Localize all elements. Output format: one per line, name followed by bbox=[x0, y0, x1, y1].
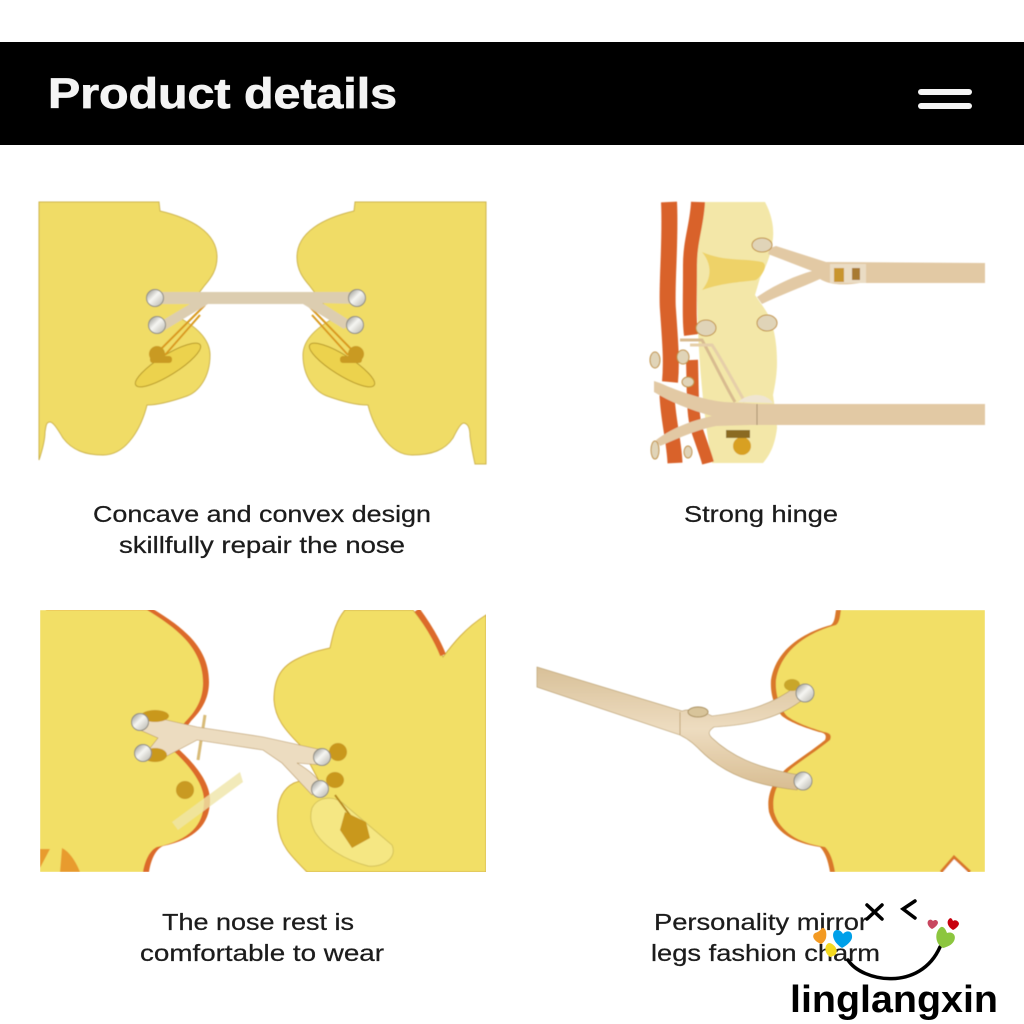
rivet back bbox=[784, 679, 800, 691]
panel: temple arm view bbox=[537, 610, 985, 872]
back nose pad bbox=[172, 715, 243, 830]
title: Product details bbox=[48, 70, 397, 118]
bridge bbox=[156, 292, 358, 330]
lens bbox=[773, 610, 985, 872]
hinge detail bbox=[830, 264, 866, 283]
eyes bbox=[867, 901, 915, 919]
rivet backs bbox=[141, 710, 347, 788]
orange rims bbox=[667, 202, 708, 463]
caption: comfortable to wear bbox=[140, 940, 384, 966]
side lens bbox=[697, 202, 777, 463]
bridge bbox=[140, 714, 322, 795]
panel: hinge side view bbox=[650, 202, 985, 463]
rivets bbox=[794, 684, 814, 790]
lens rim bbox=[768, 610, 842, 872]
arm shade bbox=[679, 712, 681, 735]
left lens bbox=[40, 610, 204, 872]
left lens rim bbox=[46, 609, 210, 872]
left lens cutouts bbox=[40, 848, 80, 872]
rivets bbox=[132, 714, 330, 798]
header band bbox=[0, 42, 1024, 145]
caption: Strong hinge bbox=[684, 501, 838, 527]
left lens bbox=[39, 202, 217, 460]
right lens bbox=[297, 202, 486, 464]
right lens bbox=[274, 610, 486, 872]
hinge cover bbox=[738, 395, 773, 403]
upper temple bbox=[757, 246, 985, 304]
panel: nose rest angled view bbox=[40, 609, 486, 872]
inner arm bbox=[680, 340, 735, 402]
icon: menu bbox=[921, 92, 969, 106]
temple screw bbox=[688, 707, 708, 717]
caption: legs fashion charm bbox=[651, 940, 880, 966]
nose pad bbox=[726, 430, 751, 455]
orange rim strip bbox=[417, 610, 443, 655]
smile bbox=[848, 947, 940, 979]
caption: The nose rest is bbox=[162, 909, 354, 935]
rivets bbox=[146, 290, 366, 334]
nose pad bbox=[311, 795, 393, 866]
panel: nose bridge front view bbox=[39, 202, 486, 464]
hearts bbox=[813, 918, 959, 957]
nose pads bbox=[130, 305, 380, 394]
lower temple bbox=[654, 381, 985, 446]
bottom notch bbox=[942, 858, 968, 872]
watermark logo bbox=[790, 901, 998, 1021]
screws bbox=[650, 238, 777, 459]
caption: skillfully repair the nose bbox=[119, 532, 405, 558]
caption: Personality mirror bbox=[654, 909, 868, 935]
caption bbox=[651, 909, 880, 966]
caption: Concave and convex design bbox=[93, 501, 431, 527]
temple arm bbox=[537, 667, 805, 790]
caption bbox=[140, 909, 384, 966]
brand name: linglangxin bbox=[790, 979, 998, 1021]
caption bbox=[93, 501, 431, 558]
